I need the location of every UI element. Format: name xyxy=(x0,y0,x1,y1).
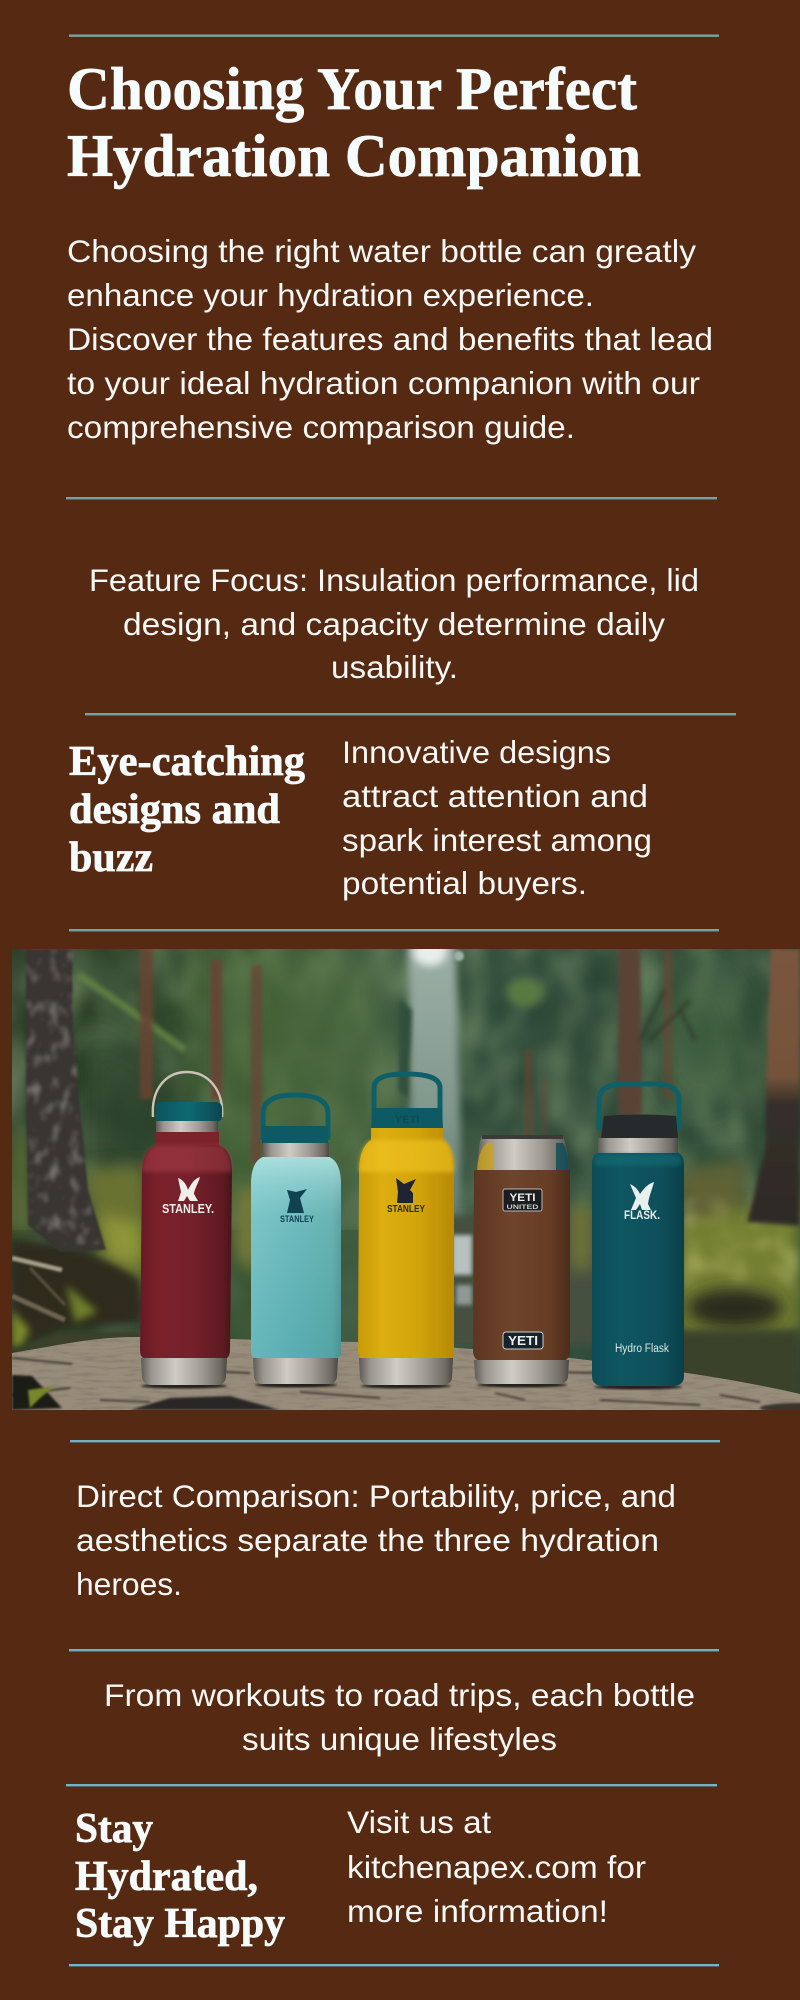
eye-catching description: attract attention and xyxy=(342,778,648,814)
direct comparison text xyxy=(76,1478,676,1602)
feature focus text: design, and capacity determine daily xyxy=(123,606,665,642)
call to action text: more information! xyxy=(347,1893,608,1929)
eye-catching description: spark interest among xyxy=(342,822,652,858)
intro paragraph: enhance your hydration experience. xyxy=(67,277,594,313)
direct comparison text: aesthetics separate the three hydration xyxy=(76,1522,659,1558)
bottle: brown Yeti xyxy=(473,1135,570,1384)
lifestyles text: From workouts to road trips, each bottle xyxy=(104,1677,695,1713)
call to action text xyxy=(347,1804,646,1929)
bottle: aqua Stanley xyxy=(251,1095,341,1384)
bottle: brown Yeti: YETI xyxy=(510,1192,536,1204)
divider line bottom xyxy=(69,1964,719,1966)
subheading: eye-catching designs: buzz xyxy=(69,835,153,881)
divider line after lifestyles xyxy=(66,1784,717,1786)
intro paragraph: Choosing the right water bottle can greatly xyxy=(67,233,696,269)
divider line after photo xyxy=(70,1440,720,1442)
title: Choosing Your Perfect xyxy=(67,56,637,122)
bottle: teal Hydro Flask: Hydro Flask xyxy=(615,1343,669,1355)
bottle: yellow Stanley: YETI xyxy=(395,1114,419,1126)
subheading: stay hydrated: Stay xyxy=(75,1806,153,1852)
bottle: brown Yeti: UNITED xyxy=(506,1204,539,1211)
distant red-brown trunks xyxy=(140,949,695,1165)
subheading: eye-catching designs: designs and xyxy=(69,787,280,833)
title xyxy=(67,56,641,189)
bottle: brown Yeti: YETI xyxy=(508,1334,538,1348)
left trunk xyxy=(26,949,106,1252)
subheading: stay hydrated: Stay Happy xyxy=(75,1901,285,1947)
rock ledge xyxy=(10,1337,800,1413)
divider line after intro xyxy=(66,497,717,499)
subheading: eye-catching designs xyxy=(69,739,305,881)
bottle: red Stanley xyxy=(140,1072,232,1385)
intro paragraph: to your ideal hydration companion with our xyxy=(67,365,700,401)
eye-catching description xyxy=(342,734,652,901)
subheading: stay hydrated: Hydrated, xyxy=(75,1854,258,1900)
subheading: eye-catching designs: Eye-catching xyxy=(69,739,305,785)
divider line before photo xyxy=(69,929,719,931)
bottle: aqua Stanley: STANLEY xyxy=(280,1214,315,1225)
divider line top xyxy=(69,34,719,37)
feature focus text xyxy=(89,562,699,685)
call to action text: kitchenapex.com for xyxy=(347,1849,646,1885)
intro paragraph: Discover the features and benefits that lead xyxy=(67,321,713,357)
bottle: yellow Stanley xyxy=(358,1074,454,1385)
call to action text: Visit us at xyxy=(347,1804,491,1840)
intro paragraph: comprehensive comparison guide. xyxy=(67,409,575,445)
feature focus text: Feature Focus: Insulation performance, lid xyxy=(89,562,699,598)
title: Hydration Companion xyxy=(67,123,641,189)
direct comparison text: Direct Comparison: Portability, price, and xyxy=(76,1478,676,1514)
bottle: red Stanley: STANLEY. xyxy=(162,1202,214,1216)
subheading: stay hydrated xyxy=(75,1806,285,1947)
moss banks and water xyxy=(12,1120,800,1395)
forest backdrop xyxy=(0,930,800,1410)
photo: five water bottles on a rock in a forest xyxy=(0,930,800,1413)
direct comparison text: heroes. xyxy=(76,1566,182,1602)
divider line after feature focus xyxy=(85,713,736,715)
right trunk xyxy=(747,949,800,1226)
feature focus text: usability. xyxy=(331,649,458,685)
lifestyles text xyxy=(104,1677,695,1757)
bottle: teal Hydro Flask xyxy=(592,1084,684,1386)
eye-catching description: Innovative designs xyxy=(342,734,611,770)
intro paragraph xyxy=(67,233,713,445)
lifestyles text: suits unique lifestyles xyxy=(242,1721,557,1757)
divider line after comparison xyxy=(69,1649,719,1651)
bottle: yellow Stanley: STANLEY xyxy=(387,1204,425,1215)
eye-catching description: potential buyers. xyxy=(342,865,587,901)
bottle: teal Hydro Flask: FLASK. xyxy=(624,1210,660,1222)
